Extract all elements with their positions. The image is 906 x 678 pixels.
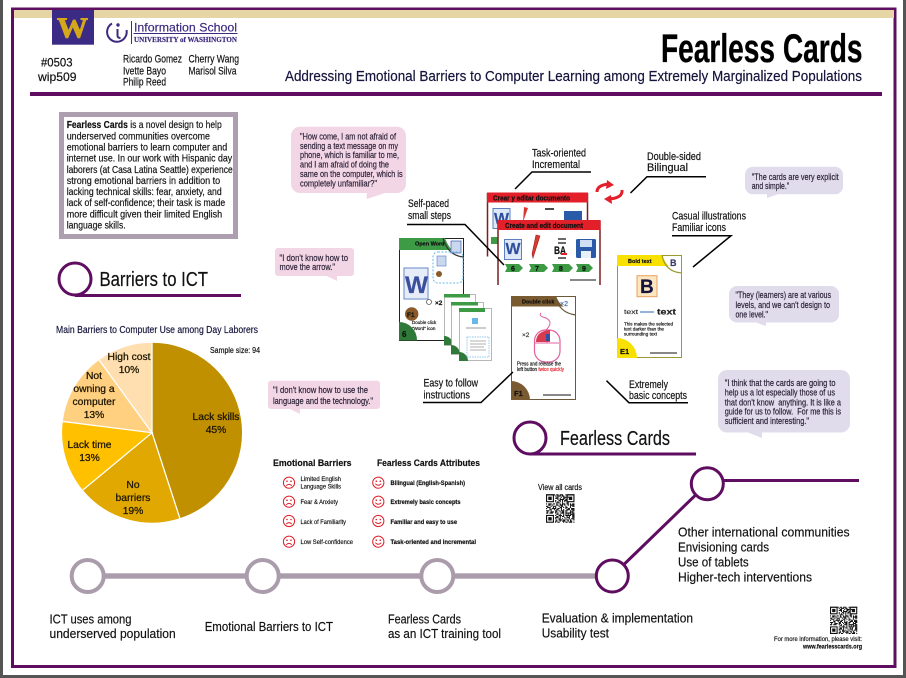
card: Double click [511, 296, 576, 400]
icon: bold text: BA [554, 245, 566, 257]
panel: intro text: lacking technical skills: fear, anxiety, and [67, 186, 222, 198]
panel: intro text: emotional barriers to learn computer and [67, 142, 227, 154]
list: emotional barriers: Language Skills [300, 484, 341, 490]
card: Bold text: text darker than the [624, 326, 664, 332]
pie chart: Lack time [67, 440, 112, 451]
icon: happy face [373, 477, 384, 488]
pie chart: barriers [116, 493, 150, 504]
pie chart: 13% [79, 453, 100, 464]
quote bubble: text message: and I am afraid of doing the [300, 160, 389, 170]
quote bubble: language and technology: "I don't know how to use the [273, 385, 368, 395]
card: Crear y editar documento [487, 192, 588, 256]
logo: University of Washington W [52, 10, 94, 45]
quote bubble: text message: phone, which is familiar to me, [300, 150, 399, 160]
step chevrons: 8 [559, 266, 563, 273]
list: emotional barriers [273, 458, 353, 547]
quote bubble: language and technology: language and the technology." [273, 396, 373, 406]
list: fearless cards attributes: Fearless Cards Attributes [377, 458, 480, 469]
quote bubble: text message: same on the computer, which is [300, 169, 403, 179]
list: emotional barriers: Limited English [300, 476, 341, 483]
annotation: self-paced [407, 198, 504, 265]
card: Open Word: "Word" icon [412, 326, 436, 331]
card: Crear y editar documento: Crear y editar documento [493, 196, 570, 202]
card: Bold text: Bold text [628, 259, 652, 265]
card: Bold text [617, 255, 682, 358]
timeline text 4: Evaluation & implementation [542, 611, 693, 626]
quote bubble: guide [718, 370, 850, 438]
timeline text 4 [542, 611, 693, 640]
annotation: double-sided: Double-sided [647, 151, 701, 163]
annotation: extremely basic [606, 379, 688, 403]
timeline [72, 468, 859, 592]
website QR: For more information, please visit: [774, 636, 862, 643]
timeline text 3: Fearless Cards [388, 611, 461, 626]
logo: Information School [107, 20, 238, 44]
timeline text 3 [388, 611, 501, 641]
card: Bold text: E1 [620, 347, 629, 356]
pie chart: Lack skills [193, 412, 239, 423]
list: fearless cards attributes [373, 458, 480, 547]
card: Open Word: 6 [402, 330, 407, 339]
timeline text 5: Envisioning cards [678, 540, 769, 555]
list: fearless cards attributes: Task-oriented and incremental [390, 539, 476, 546]
step chevrons [505, 264, 593, 273]
timeline text 5: Use of tablets [678, 554, 749, 570]
quote bubble: guide: sufficient and interesting." [725, 416, 809, 426]
panel: intro text: more difficult given their limited English [67, 208, 222, 220]
authors: Ricardo Gomez [123, 54, 182, 66]
panel: intro text [62, 114, 236, 236]
step chevrons: 7 [535, 266, 539, 273]
timeline text 1 [50, 611, 176, 641]
icon: mouse: ×2 [522, 332, 530, 339]
view all cards QR [538, 483, 582, 523]
annotation: casual illustrations: Familiar icons [672, 222, 726, 234]
pie chart: No [126, 480, 140, 491]
pie chart: Not [86, 371, 102, 382]
list: emotional barriers: Low Self-confidence [300, 539, 353, 546]
icon: double-sided red arrows [597, 180, 622, 204]
quote bubble: language and technology [268, 381, 380, 414]
card: Open Word: F1 [407, 312, 415, 319]
list: fearless cards attributes: Extremely basic concepts [390, 499, 461, 506]
milestone 5 [691, 468, 723, 500]
poster id: wip509 [37, 70, 77, 84]
card: Open Word [399, 238, 464, 340]
card: Bold text: text [657, 308, 676, 316]
quote bubble: guide: "I think that the cards are going to [725, 378, 836, 388]
annotation: task-oriented [515, 148, 591, 189]
card: Double click: ×2 [560, 301, 568, 308]
timeline text 4: Usability test [542, 626, 609, 640]
milestone 1 [72, 560, 104, 592]
annotation: casual illustrations: Casual illustrations [672, 210, 746, 222]
annotation: self-paced: Self-paced [408, 198, 449, 210]
milestone 3 [421, 560, 453, 592]
panel: intro text: internet use. In our work with Hispanic day [67, 153, 233, 165]
card: Open Word: Open Word [415, 242, 445, 248]
icon: sad face [283, 477, 295, 488]
annotation: double-sided: Bilingual [647, 162, 688, 174]
quote bubble: various levels: levels, and we can't design to [736, 300, 830, 310]
list: fearless cards attributes: Bilingual (English-Spanish) [390, 480, 465, 487]
quote bubble: arrow [275, 248, 354, 281]
quote bubble: guide: that don't know anything. It is like a [725, 397, 841, 407]
icon: Word: W [506, 241, 521, 258]
quote bubble: text message: sending a text message on my [300, 141, 398, 151]
sample size: Sample size: 94 [210, 346, 260, 355]
panel: intro text: strong emotional barriers in addition to [67, 175, 220, 187]
subtitle: Addressing Emotional Barriers to Computer Learning among Extremely Marginalized Populations [285, 69, 862, 85]
authors: Ivette Bayo [123, 66, 166, 78]
heading: Fearless Cards: Fearless Cards [560, 428, 670, 450]
timeline text 3: as an ICT training tool [388, 626, 501, 641]
pie chart [61, 342, 243, 523]
milestone 2 [247, 560, 279, 592]
poster id: #0503 [41, 56, 73, 70]
logo: Information School: UNIVERSITY of WASHINGTON [134, 36, 237, 44]
card: Double click: Double click [522, 300, 555, 306]
icon: pencil [532, 235, 540, 258]
step chevrons: 9 [582, 266, 586, 273]
quote bubble: various levels [729, 286, 839, 326]
annotation: easy to follow: Easy to follow [424, 378, 478, 390]
logo: Information School: Information School [134, 20, 237, 34]
card: Create and edit document [498, 220, 600, 285]
logo: University of Washington W: W [57, 12, 88, 44]
list: emotional barriers: Emotional Barriers [273, 458, 352, 469]
list: emotional barriers: Lack of Familiarity [300, 519, 346, 526]
quote bubble: text message: completely unfamiliar?" [300, 179, 377, 189]
timeline text 1: ICT uses among [50, 611, 132, 626]
card: Bold text: surrounding text [624, 332, 658, 338]
authors: Marisol Silva [188, 66, 237, 78]
quote bubble: text message [291, 127, 406, 199]
chart title: Main Barriers to Computer Use among Day Laborers [56, 325, 258, 336]
timeline text 1: underserved population [50, 626, 176, 641]
annotation: double-sided [630, 151, 706, 193]
icon: sad face [283, 515, 295, 527]
quote bubble: guide: guide for us to follow. For me this is [725, 407, 841, 417]
card: Double click: F1 [514, 389, 523, 398]
card: Double click: Press and release the [517, 362, 561, 368]
website QR [774, 607, 862, 650]
annotation: casual illustrations [672, 210, 746, 267]
quote bubble: arrow: "I don't know how to [280, 253, 348, 263]
timeline text 5: Other international communities [678, 525, 850, 540]
pie chart: 13% [84, 410, 104, 421]
icon: happy face [373, 496, 384, 507]
authors: Cherry Wang [188, 54, 239, 66]
quote bubble: various levels: one level." [736, 310, 768, 320]
card: Bold text: This makes the selected [624, 322, 673, 328]
annotation: extremely basic: Extremely [629, 379, 669, 391]
heading: Barriers to ICT [59, 263, 241, 297]
annotation: extremely basic: basic concepts [629, 390, 687, 402]
heading: Barriers to ICT: Barriers to ICT [100, 269, 208, 291]
list: fearless cards attributes: Familiar and easy to use [390, 519, 457, 526]
timeline text 5 [678, 525, 850, 584]
icon: bold B: B [640, 277, 654, 298]
poster id [37, 56, 77, 84]
annotation: task-oriented: Task-oriented [532, 148, 586, 160]
annotation: easy to follow [423, 372, 513, 402]
card: Open Word: Double click [412, 320, 437, 325]
website QR: www.fearlesscards.org [802, 644, 862, 650]
quote bubble: various levels: "They (learners) are at various [736, 290, 831, 300]
card stack: small steps [444, 294, 492, 361]
panel: intro text: lack of self-confidence; their task is made [67, 197, 225, 209]
annotation: task-oriented: Incremental [532, 159, 580, 171]
icon: sad face [283, 536, 295, 547]
quote bubble: guide: help us a lot especially those of us [725, 388, 835, 398]
icon: save [576, 239, 596, 258]
card: Open Word: ×2 [435, 300, 443, 307]
list: emotional barriers: Fear & Anxiety [300, 499, 339, 506]
quote bubble: arrow: move the arrow." [280, 262, 335, 272]
quote bubble: text message: "How come, I am not afraid of [300, 131, 396, 141]
quote bubble: explicit and simple: "The cards are very explicit [752, 172, 839, 182]
pie chart: 19% [123, 506, 143, 517]
pie chart: computer [73, 397, 116, 408]
icon: large Word: W [405, 272, 428, 299]
icon: happy face [373, 515, 384, 527]
panel: intro text: language skills. [67, 220, 126, 232]
icon: sad face [283, 496, 295, 507]
pie chart: High cost [108, 352, 151, 363]
timeline text 5: Higher-tech interventions [678, 570, 812, 584]
timeline text 2: Emotional Barriers to ICT [205, 619, 333, 634]
authors: Philip Reed [123, 76, 166, 88]
icon: happy face [373, 536, 384, 547]
quote bubble: explicit and simple [745, 167, 843, 198]
card: Crear y editar documento: W [494, 211, 510, 228]
annotation: self-paced: small steps [408, 210, 451, 222]
card: Create and edit document: Create and edit document [505, 223, 584, 230]
heading: Fearless Cards [514, 422, 696, 456]
card: Double click: left button twice quickly [517, 367, 564, 373]
pie chart: owning a [73, 384, 115, 395]
annotation: easy to follow: instructions [424, 390, 470, 402]
panel: intro text: underserved communities overcome [67, 130, 210, 142]
card: Bold text: B [670, 258, 677, 268]
step chevrons: 6 [511, 266, 515, 273]
view all cards QR: View all cards [538, 483, 582, 492]
pie chart: 45% [206, 425, 226, 436]
pie chart: 10% [119, 365, 139, 376]
milestone 4 [596, 560, 628, 592]
quote bubble: explicit and simple: and simple." [752, 181, 789, 191]
panel: intro text: Fearless Cards is a novel design to help [67, 119, 222, 131]
authors [123, 54, 239, 88]
card: Bold text: text [624, 309, 638, 316]
panel: intro text: laborers (at Casa Latina Seattle) experience [67, 164, 233, 176]
